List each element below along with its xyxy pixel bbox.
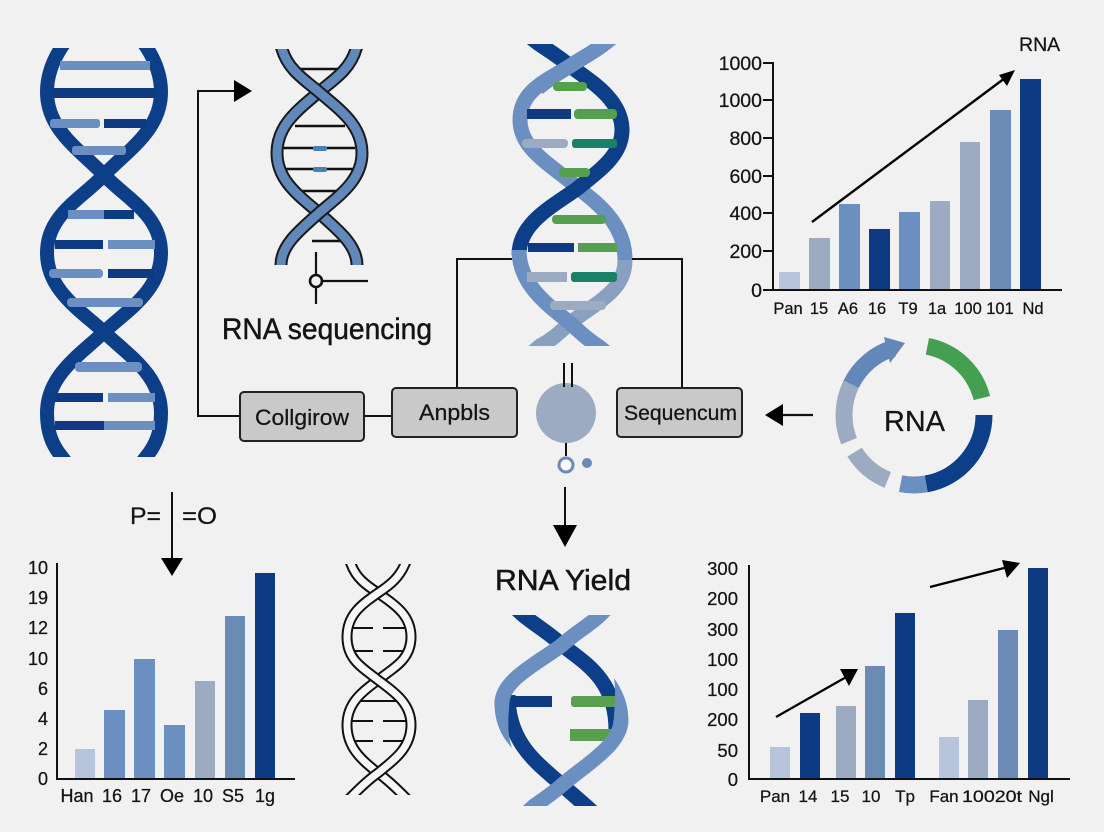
x axis labels: 16 xyxy=(102,786,122,806)
trend arrow: left group xyxy=(776,669,858,717)
x axis labels: T9 xyxy=(898,300,918,318)
box: Anpbls: Anpbls xyxy=(419,400,490,425)
y axis labels: 0 xyxy=(728,769,738,790)
arrow: down to RNA Yield xyxy=(553,487,577,547)
x axis labels xyxy=(773,300,1044,318)
y axis labels: 0 xyxy=(38,769,48,789)
arrow: ring to Sequencum xyxy=(765,404,813,426)
strands xyxy=(344,552,412,804)
box: Sequencum: Sequencum xyxy=(624,402,737,425)
connector: Collgirow to Anpbls xyxy=(364,415,392,417)
x axis labels: Nd xyxy=(1022,300,1044,318)
y axis labels xyxy=(707,558,738,790)
x axis labels: Pan xyxy=(760,787,790,806)
y axis labels: 4 xyxy=(38,709,48,729)
lower blue strand xyxy=(519,250,612,357)
rungs xyxy=(283,69,355,241)
ring arrowhead xyxy=(884,337,905,363)
x axis labels: 101 xyxy=(986,300,1014,318)
trend arrow xyxy=(812,70,1015,222)
x axis labels: 1g xyxy=(255,786,275,806)
x axis labels xyxy=(60,786,275,806)
icon: outline DNA helix xyxy=(344,552,412,804)
y axis labels: 300 xyxy=(707,558,738,579)
x axis labels: Tp xyxy=(895,787,915,806)
y axis labels: 10 xyxy=(28,558,48,578)
icon: central node circle xyxy=(536,363,596,472)
box: Anpbls xyxy=(392,388,517,437)
x axis labels: 15 xyxy=(831,787,849,806)
top light strand overlap xyxy=(542,44,616,94)
bar chart: bottom left xyxy=(28,558,295,806)
x axis labels: 16 xyxy=(868,300,886,318)
y axis labels: 50 xyxy=(717,740,738,761)
x axis labels: 100 xyxy=(954,300,982,318)
bar chart: top right xyxy=(719,34,1062,318)
box: Sequencum xyxy=(617,388,742,437)
y axis labels: 200 xyxy=(707,588,738,609)
arrow: from Collgirow box to RNA sequencing helix xyxy=(198,80,252,416)
x axis labels xyxy=(760,787,1054,806)
x axis labels: Ngl xyxy=(1028,787,1054,806)
x axis labels: Fan xyxy=(929,787,959,806)
helix rungs xyxy=(49,61,156,430)
y axis labels: 10 xyxy=(28,649,48,669)
ring label: RNA xyxy=(884,406,946,438)
box: Collgirow: Collgirow xyxy=(255,405,349,430)
chart label: RNA xyxy=(1019,34,1060,56)
bars xyxy=(779,79,1041,290)
icon: RNA ring diagram xyxy=(844,337,984,485)
bars xyxy=(770,568,1048,778)
x axis labels: Han xyxy=(60,786,94,806)
x axis labels: 14 xyxy=(799,787,817,806)
stem with node xyxy=(310,252,368,304)
bars xyxy=(75,573,275,779)
axes xyxy=(749,565,1070,779)
y axis labels: 12 xyxy=(28,618,48,638)
helix strands xyxy=(519,33,625,357)
x axis labels: S5 xyxy=(222,786,244,806)
y axis labels: 300 xyxy=(707,619,738,640)
y axis labels: 2 xyxy=(38,739,48,759)
x axis labels: Oe xyxy=(160,786,184,806)
icon: central DNA helix with green rungs xyxy=(519,33,625,357)
strands xyxy=(277,38,362,275)
back strand, upper xyxy=(520,33,625,260)
x axis labels: Pan xyxy=(773,300,803,318)
y axis labels: 200 xyxy=(729,241,762,263)
formula label: P= and =O with arrow: =O xyxy=(182,503,217,530)
navy strand xyxy=(519,33,622,255)
connector: helix to Anpbls xyxy=(457,259,512,388)
trend arrow: right group xyxy=(930,560,1020,587)
x axis labels: 1a xyxy=(928,300,947,318)
y axis labels: 200 xyxy=(707,709,738,730)
y axis labels: 0 xyxy=(751,280,762,302)
y axis labels: 600 xyxy=(729,166,762,188)
helix strands xyxy=(47,36,161,470)
y axis labels: 100 xyxy=(707,649,738,670)
y axis labels: 6 xyxy=(38,679,48,699)
x axis labels: 10020t xyxy=(962,787,1022,806)
tapered strand end: left xyxy=(494,700,512,748)
icon: large navy DNA helix xyxy=(47,36,161,470)
y axis labels xyxy=(28,558,48,789)
rungs xyxy=(522,82,617,310)
y axis labels: 800 xyxy=(729,128,762,150)
axes and ticks xyxy=(763,63,1062,290)
formula label: P= and =O with arrow: P= xyxy=(130,503,161,530)
connector: helix to Sequencum xyxy=(632,259,682,388)
icon: outlined blue DNA helix with stem xyxy=(277,38,368,304)
y axis labels: 1000 xyxy=(719,90,762,112)
ring segments xyxy=(844,346,984,485)
tapered strand end: right xyxy=(614,678,628,722)
x axis labels: 17 xyxy=(131,786,151,806)
rungs xyxy=(512,696,618,741)
x axis labels: 10 xyxy=(193,786,213,806)
heading: RNA Yield: RNA Yield xyxy=(495,565,631,597)
heading: RNA sequencing: RNA sequencing xyxy=(222,313,432,346)
y axis labels: 100 xyxy=(707,679,738,700)
x axis labels: 15 xyxy=(810,300,828,318)
axes xyxy=(57,563,295,779)
back strand, lower xyxy=(527,260,625,357)
formula label: P= and =O with arrow xyxy=(130,492,217,576)
y axis labels: 1000 xyxy=(719,53,762,75)
icon: bottom DNA helix xyxy=(494,615,628,806)
x axis labels: A6 xyxy=(838,300,858,318)
y axis labels: 19 xyxy=(28,588,48,608)
y axis labels xyxy=(719,53,762,302)
box: Collgirow xyxy=(240,392,364,441)
bar chart: bottom right xyxy=(707,558,1070,806)
rungs xyxy=(350,628,407,741)
y axis labels: 400 xyxy=(729,203,762,225)
x axis labels: 10 xyxy=(862,787,880,806)
blue strands xyxy=(502,603,621,817)
navy strands xyxy=(508,615,616,806)
